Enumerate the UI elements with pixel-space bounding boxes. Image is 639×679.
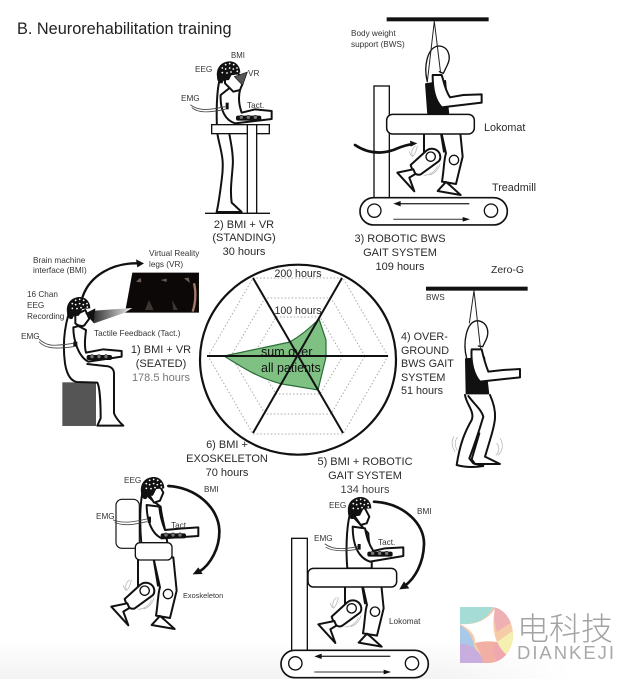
panel: 3) Robotic BWS gait system: 109 hours: [376, 261, 425, 273]
panel: 4) Overground BWS gait system: 51 hours: [401, 385, 444, 397]
watermark logo: 电科技: [517, 604, 613, 650]
panel: 6) BMI + exoskeleton: EXOSKELETON: [186, 453, 268, 465]
panel: 3) Robotic BWS gait system: Lokomat: [484, 122, 525, 134]
panel: 2) BMI + VR standing: VR: [248, 69, 259, 78]
panel: 2) BMI + VR standing: BMI: [231, 51, 245, 60]
panel: 2) BMI + VR standing: Tact.: [247, 101, 264, 110]
panel: 5) BMI + robotic gait system: [281, 456, 432, 678]
panel: 2) BMI + VR standing: [181, 51, 276, 258]
panel: 1) BMI + VR seated: 16 Chan: [27, 290, 58, 299]
panel: 6) BMI + exoskeleton: Tact.: [171, 521, 188, 530]
panel: 4) Overground BWS gait system: [401, 265, 528, 467]
panel: 5) BMI + robotic gait system: 5) BMI + ROBOTIC: [317, 456, 413, 468]
panel: 3) Robotic BWS gait system: 3) ROBOTIC BWS: [354, 233, 446, 245]
panel: 1) BMI + VR seated: Tactile Feedback (Tact.): [94, 329, 181, 338]
radar chart: 200 hours: [274, 268, 322, 280]
panel: 4) Overground BWS gait system: BWS GAIT: [401, 358, 454, 370]
panel: 1) BMI + VR seated: (SEATED): [136, 358, 186, 370]
panel: 4) Overground BWS gait system: BWS: [426, 293, 445, 302]
panel: 1) BMI + VR seated: 178.5 hours: [132, 372, 191, 384]
radar chart: 100 hours: [274, 305, 322, 317]
panel: 3) Robotic BWS gait system: Treadmill: [492, 182, 536, 194]
panel: 2) BMI + VR standing: 2) BMI + VR: [214, 219, 274, 231]
radar chart: [200, 265, 396, 455]
panel: 3) Robotic BWS gait system: Body weight: [351, 29, 396, 38]
panel: 3) Robotic BWS gait system: GAIT SYSTEM: [363, 247, 437, 259]
panel: 5) BMI + robotic gait system: Lokomat: [389, 617, 421, 626]
panel: 6) BMI + exoskeleton: 70 hours: [206, 467, 249, 479]
panel: 1) BMI + VR seated: [21, 249, 200, 426]
panel: 5) BMI + robotic gait system: BMI: [417, 507, 432, 516]
panel: 5) BMI + robotic gait system: EEG: [329, 501, 346, 510]
panel: 4) Overground BWS gait system: GROUND: [401, 345, 449, 357]
watermark logo: [458, 604, 614, 664]
title: B. Neurorehabilitation training: [17, 20, 232, 38]
panel: 6) BMI + exoskeleton: BMI: [204, 485, 219, 494]
panel: 2) BMI + VR standing: 30 hours: [223, 246, 266, 258]
panel: 1) BMI + VR seated: Brain machine: [33, 256, 86, 265]
watermark logo: DIANKEJI: [517, 642, 614, 663]
radar chart: all patients: [261, 361, 321, 375]
panel: 1) BMI + VR seated: EEG: [27, 301, 44, 310]
panel: 1) BMI + VR seated: legs (VR): [149, 260, 183, 269]
panel: 5) BMI + robotic gait system: GAIT SYSTEM: [328, 470, 402, 482]
panel: 2) BMI + VR standing: EEG: [195, 65, 212, 74]
panel: 4) Overground BWS gait system: SYSTEM: [401, 372, 445, 384]
panel: 3) Robotic BWS gait system: [351, 17, 536, 273]
panel: 4) Overground BWS gait system: Zero-G: [491, 265, 524, 276]
panel: 6) BMI + exoskeleton: 6) BMI +: [206, 439, 248, 451]
panel: 5) BMI + robotic gait system: 134 hours: [341, 484, 390, 496]
logo mark: [460, 607, 513, 663]
panel: 1) BMI + VR seated: EMG: [21, 332, 40, 341]
panel: 1) BMI + VR seated: Recording: [27, 312, 65, 321]
panel: 5) BMI + robotic gait system: EMG: [314, 534, 333, 543]
panel: 4) Overground BWS gait system: 4) OVER-: [401, 331, 448, 343]
panel: 2) BMI + VR standing: EMG: [181, 94, 200, 103]
panel: 1) BMI + VR seated: Virtual Reality: [149, 249, 200, 258]
panel: 1) BMI + VR seated: 1) BMI + VR: [131, 344, 191, 356]
panel: 5) BMI + robotic gait system: Tact.: [378, 538, 395, 547]
panel: 6) BMI + exoskeleton: [96, 439, 268, 629]
radar chart: sum over: [261, 345, 312, 359]
panel: 6) BMI + exoskeleton: Exoskeleton: [183, 591, 223, 600]
panel: 2) BMI + VR standing: (STANDING): [212, 232, 276, 244]
panel: 6) BMI + exoskeleton: EMG: [96, 512, 115, 521]
panel: 3) Robotic BWS gait system: support (BWS): [351, 40, 405, 49]
panel: 6) BMI + exoskeleton: EEG: [124, 476, 141, 485]
panel: 1) BMI + VR seated: interface (BMI): [33, 266, 87, 275]
